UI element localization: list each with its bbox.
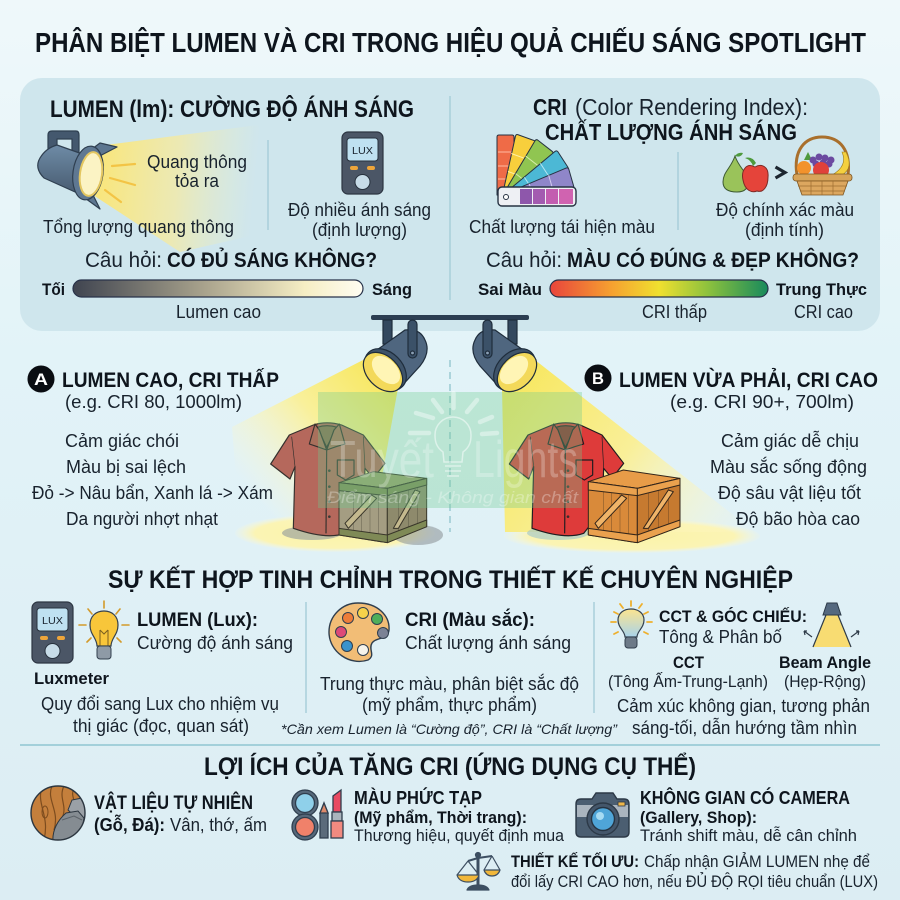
text: spaces with cameras: Tránh shift màu, dễ cân chỉnh — [640, 826, 857, 845]
icon: luxmeter: LUX — [42, 615, 63, 627]
text: CCT and beam angle: Cảm xúc không gian, tương phản — [617, 696, 870, 716]
text: optimal design: THIẾT KẾ TỐI ƯU: — [511, 851, 639, 871]
text: complex colours — [354, 787, 564, 845]
lumen scale bar: Sáng — [372, 280, 412, 299]
text: CCT and beam angle — [608, 607, 871, 738]
text: CRI colour — [320, 609, 579, 715]
option A: lumen cao, CRI thấp: Cảm giác chói — [65, 431, 179, 451]
scene: two spotlights over shirts and crates — [28, 315, 878, 553]
watermark: Tuyết Lights: Điểm sáng - Không gian chất — [327, 488, 579, 507]
text: lumen lux: thị giác (đọc, quan sát) — [73, 716, 249, 736]
option A: lumen cao, CRI thấp: Đỏ -> Nâu bẩn, Xanh lá -> Xám — [32, 483, 273, 503]
label: quang thông tỏa ra: Quang thông — [147, 152, 247, 172]
CRI scale bar: Trung Thực — [776, 280, 867, 299]
icon: cosmetics — [292, 790, 343, 840]
CRI heading: CHẤT LƯỢNG ÁNH SÁNG — [545, 118, 797, 145]
text: natural materials: Vân, thớ, ấm — [170, 815, 267, 835]
light beams — [232, 358, 755, 532]
text: CCT and beam angle: Tông & Phân bố — [659, 627, 782, 647]
right shirt: vivid red — [509, 423, 624, 536]
left track spotlight — [356, 320, 427, 399]
benefit: spaces with cameras — [576, 787, 857, 845]
CRI scale bar: CRI cao — [794, 302, 853, 322]
icon: fruit compared with basket — [723, 137, 852, 195]
option B: lumen vừa phải, CRI cao: Màu sắc sống động — [710, 456, 867, 477]
text: CRI colour: Chất lượng ánh sáng — [405, 633, 571, 653]
label: quang thông tỏa ra: tỏa ra — [175, 171, 220, 191]
CRI heading: (Color Rendering Index): — [575, 94, 808, 120]
question: có đủ sáng không: Câu hỏi: — [85, 249, 162, 272]
icon: lux meter: LUX — [352, 145, 373, 157]
CRI heading — [533, 94, 808, 145]
text: spaces with cameras: (Gallery, Shop): — [640, 808, 757, 827]
text: CCT and beam angle: Beam Angle — [779, 653, 871, 672]
label: quang thông tỏa ra — [147, 152, 247, 191]
floor light pools — [235, 514, 760, 553]
label: độ nhiều ánh sáng: (định lượng) — [312, 220, 407, 240]
text: complex colours: MÀU PHỨC TẠP — [354, 787, 482, 808]
text: CCT and beam angle: (Tông Ấm-Trung-Lạnh) — [608, 672, 768, 691]
question: màu có đúng và đẹp không: MÀU CÓ ĐÚNG & ĐẸP KHÔNG? — [567, 248, 859, 272]
callout: optimal design — [457, 851, 878, 891]
lumen scale bar: Tối — [42, 280, 65, 299]
panel: lumen and CRI comparison — [20, 78, 880, 331]
CRI scale bar: CRI thấp — [642, 302, 707, 322]
text: spaces with cameras: KHÔNG GIAN CÓ CAMERA — [640, 787, 850, 808]
text: CCT and beam angle: CCT & GÓC CHIẾU: — [659, 607, 807, 626]
watermark: Tuyết Lights: Tuyết — [330, 431, 434, 489]
icon: luxmeter — [32, 602, 73, 663]
icon: lux meter — [342, 132, 383, 194]
option A: lumen cao, CRI thấp: Màu bị sai lệch — [66, 457, 186, 477]
benefit: complex colours — [292, 787, 564, 845]
text: CCT and beam angle: (Hẹp-Rộng) — [784, 672, 866, 691]
question: có đủ sáng không — [85, 248, 377, 272]
icon: CCT bulb — [611, 601, 652, 648]
text: CCT and beam angle: sáng-tối, dẫn hướng tầm nhìn — [632, 717, 857, 738]
CRI heading: CRI — [533, 94, 567, 120]
text: lumen lux: Quy đổi sang Lux cho nhiệm vụ — [41, 694, 279, 714]
lumen heading: LUMEN (lm): CƯỜNG ĐỘ ÁNH SÁNG — [50, 95, 414, 123]
column: CCT and beam angle — [608, 601, 871, 738]
icon: light rays — [105, 164, 135, 202]
label: tổng lượng quang thông: Tổng lượng quang thông — [43, 217, 234, 237]
label: độ nhiều ánh sáng — [288, 200, 431, 240]
icon: camera — [576, 793, 629, 837]
text: natural materials — [94, 792, 267, 835]
text: CCT and beam angle: CCT — [673, 653, 705, 672]
CRI scale bar — [478, 280, 867, 322]
text: lumen lux: LUMEN (Lux): — [137, 610, 258, 631]
icon: colour swatch fan — [495, 134, 576, 208]
right crate: warm wood — [588, 470, 680, 543]
option A: lumen cao, CRI thấp: A — [34, 370, 48, 389]
heading: sự kết hợp tinh chỉnh: SỰ KẾT HỢP TINH CHỈNH TRONG THIẾT KẾ CHUYÊN NGHIỆP — [108, 564, 793, 594]
lumen light beam — [90, 125, 268, 252]
text: optimal design — [511, 851, 878, 891]
text: complex colours: (Mỹ phẩm, Thời trang): — [354, 808, 527, 827]
option B: lumen vừa phải, CRI cao: (e.g. CRI 90+, 700lm) — [670, 392, 854, 412]
option B: lumen vừa phải, CRI cao: Độ sâu vật liệu tốt — [718, 483, 861, 503]
label: chất lượng tái hiện màu: Chất lượng tái hiện màu — [469, 217, 655, 237]
label: độ chính xác màu: Độ chính xác màu — [716, 200, 854, 220]
text: complex colours: Thương hiệu, quyết định mua — [354, 826, 564, 845]
option A: lumen cao, CRI thấp — [28, 366, 279, 529]
text: lumen lux — [34, 610, 293, 736]
text: optimal design: Chấp nhận GIẢM LUMEN nhẹ để — [644, 852, 870, 871]
lumen scale bar: Lumen cao — [176, 302, 261, 322]
question: có đủ sáng không: CÓ ĐỦ SÁNG KHÔNG? — [167, 248, 377, 272]
icon: balance scale — [457, 852, 500, 890]
text: natural materials: VẬT LIỆU TỰ NHIÊN — [94, 792, 253, 814]
lumen scale bar — [42, 280, 412, 322]
benefit: natural materials — [31, 786, 267, 842]
question: màu có đúng và đẹp không: Câu hỏi: — [486, 249, 562, 272]
note: lumen vs CRI: *Cần xem Lumen là “Cường độ”, CRI là “Chất lượng” — [281, 721, 618, 737]
text: CRI colour: (mỹ phẩm, thực phẩm) — [362, 695, 537, 715]
label: độ chính xác màu — [716, 200, 854, 240]
option A: lumen cao, CRI thấp: Da người nhợt nhạt — [66, 509, 218, 529]
option B: lumen vừa phải, CRI cao: Cảm giác dễ chịu — [721, 430, 859, 451]
option B: lumen vừa phải, CRI cao: LUMEN VỪA PHẢI, CRI CAO — [619, 368, 878, 392]
column: CRI colour — [320, 603, 579, 715]
option B: lumen vừa phải, CRI cao: Độ bão hòa cao — [736, 509, 860, 529]
text: lumen lux: Luxmeter — [34, 669, 109, 688]
icon: light bulb — [79, 601, 129, 659]
icon: wood and stone — [31, 786, 88, 842]
text: CRI colour: Trung thực màu, phân biệt sắc độ — [320, 673, 579, 694]
label: độ nhiều ánh sáng: Độ nhiều ánh sáng — [288, 200, 431, 220]
option A: lumen cao, CRI thấp: LUMEN CAO, CRI THẤP — [62, 369, 279, 392]
column: lumen lux — [32, 601, 293, 736]
heading: lợi ích của tăng CRI: LỢI ÍCH CỦA TĂNG CRI (ỨNG DỤNG CỤ THỂ) — [204, 751, 696, 781]
text: spaces with cameras — [640, 787, 857, 845]
left shirt: dull red — [271, 423, 385, 536]
text: lumen lux: Cường độ ánh sáng — [137, 633, 293, 653]
watermark: Tuyết Lights — [318, 392, 582, 508]
icon: palette — [329, 603, 389, 661]
text: natural materials: (Gỗ, Đá): — [94, 814, 165, 835]
left crate: faded wood — [339, 472, 427, 543]
watermark: Tuyết Lights: Lights — [473, 431, 578, 489]
object shadows — [282, 525, 589, 545]
track rail — [371, 315, 529, 320]
CRI scale bar: Sai Màu — [478, 280, 542, 299]
icon: spotlight — [38, 131, 117, 209]
label: độ chính xác màu: (định tính) — [745, 220, 824, 240]
text: CRI colour: CRI (Màu sắc): — [405, 609, 535, 631]
option A: lumen cao, CRI thấp: (e.g. CRI 80, 1000lm) — [65, 392, 242, 412]
right track spotlight — [473, 320, 544, 399]
option B: lumen vừa phải, CRI cao — [584, 364, 878, 529]
option B: lumen vừa phải, CRI cao: B — [592, 369, 604, 388]
icon: beam angle — [804, 603, 859, 647]
